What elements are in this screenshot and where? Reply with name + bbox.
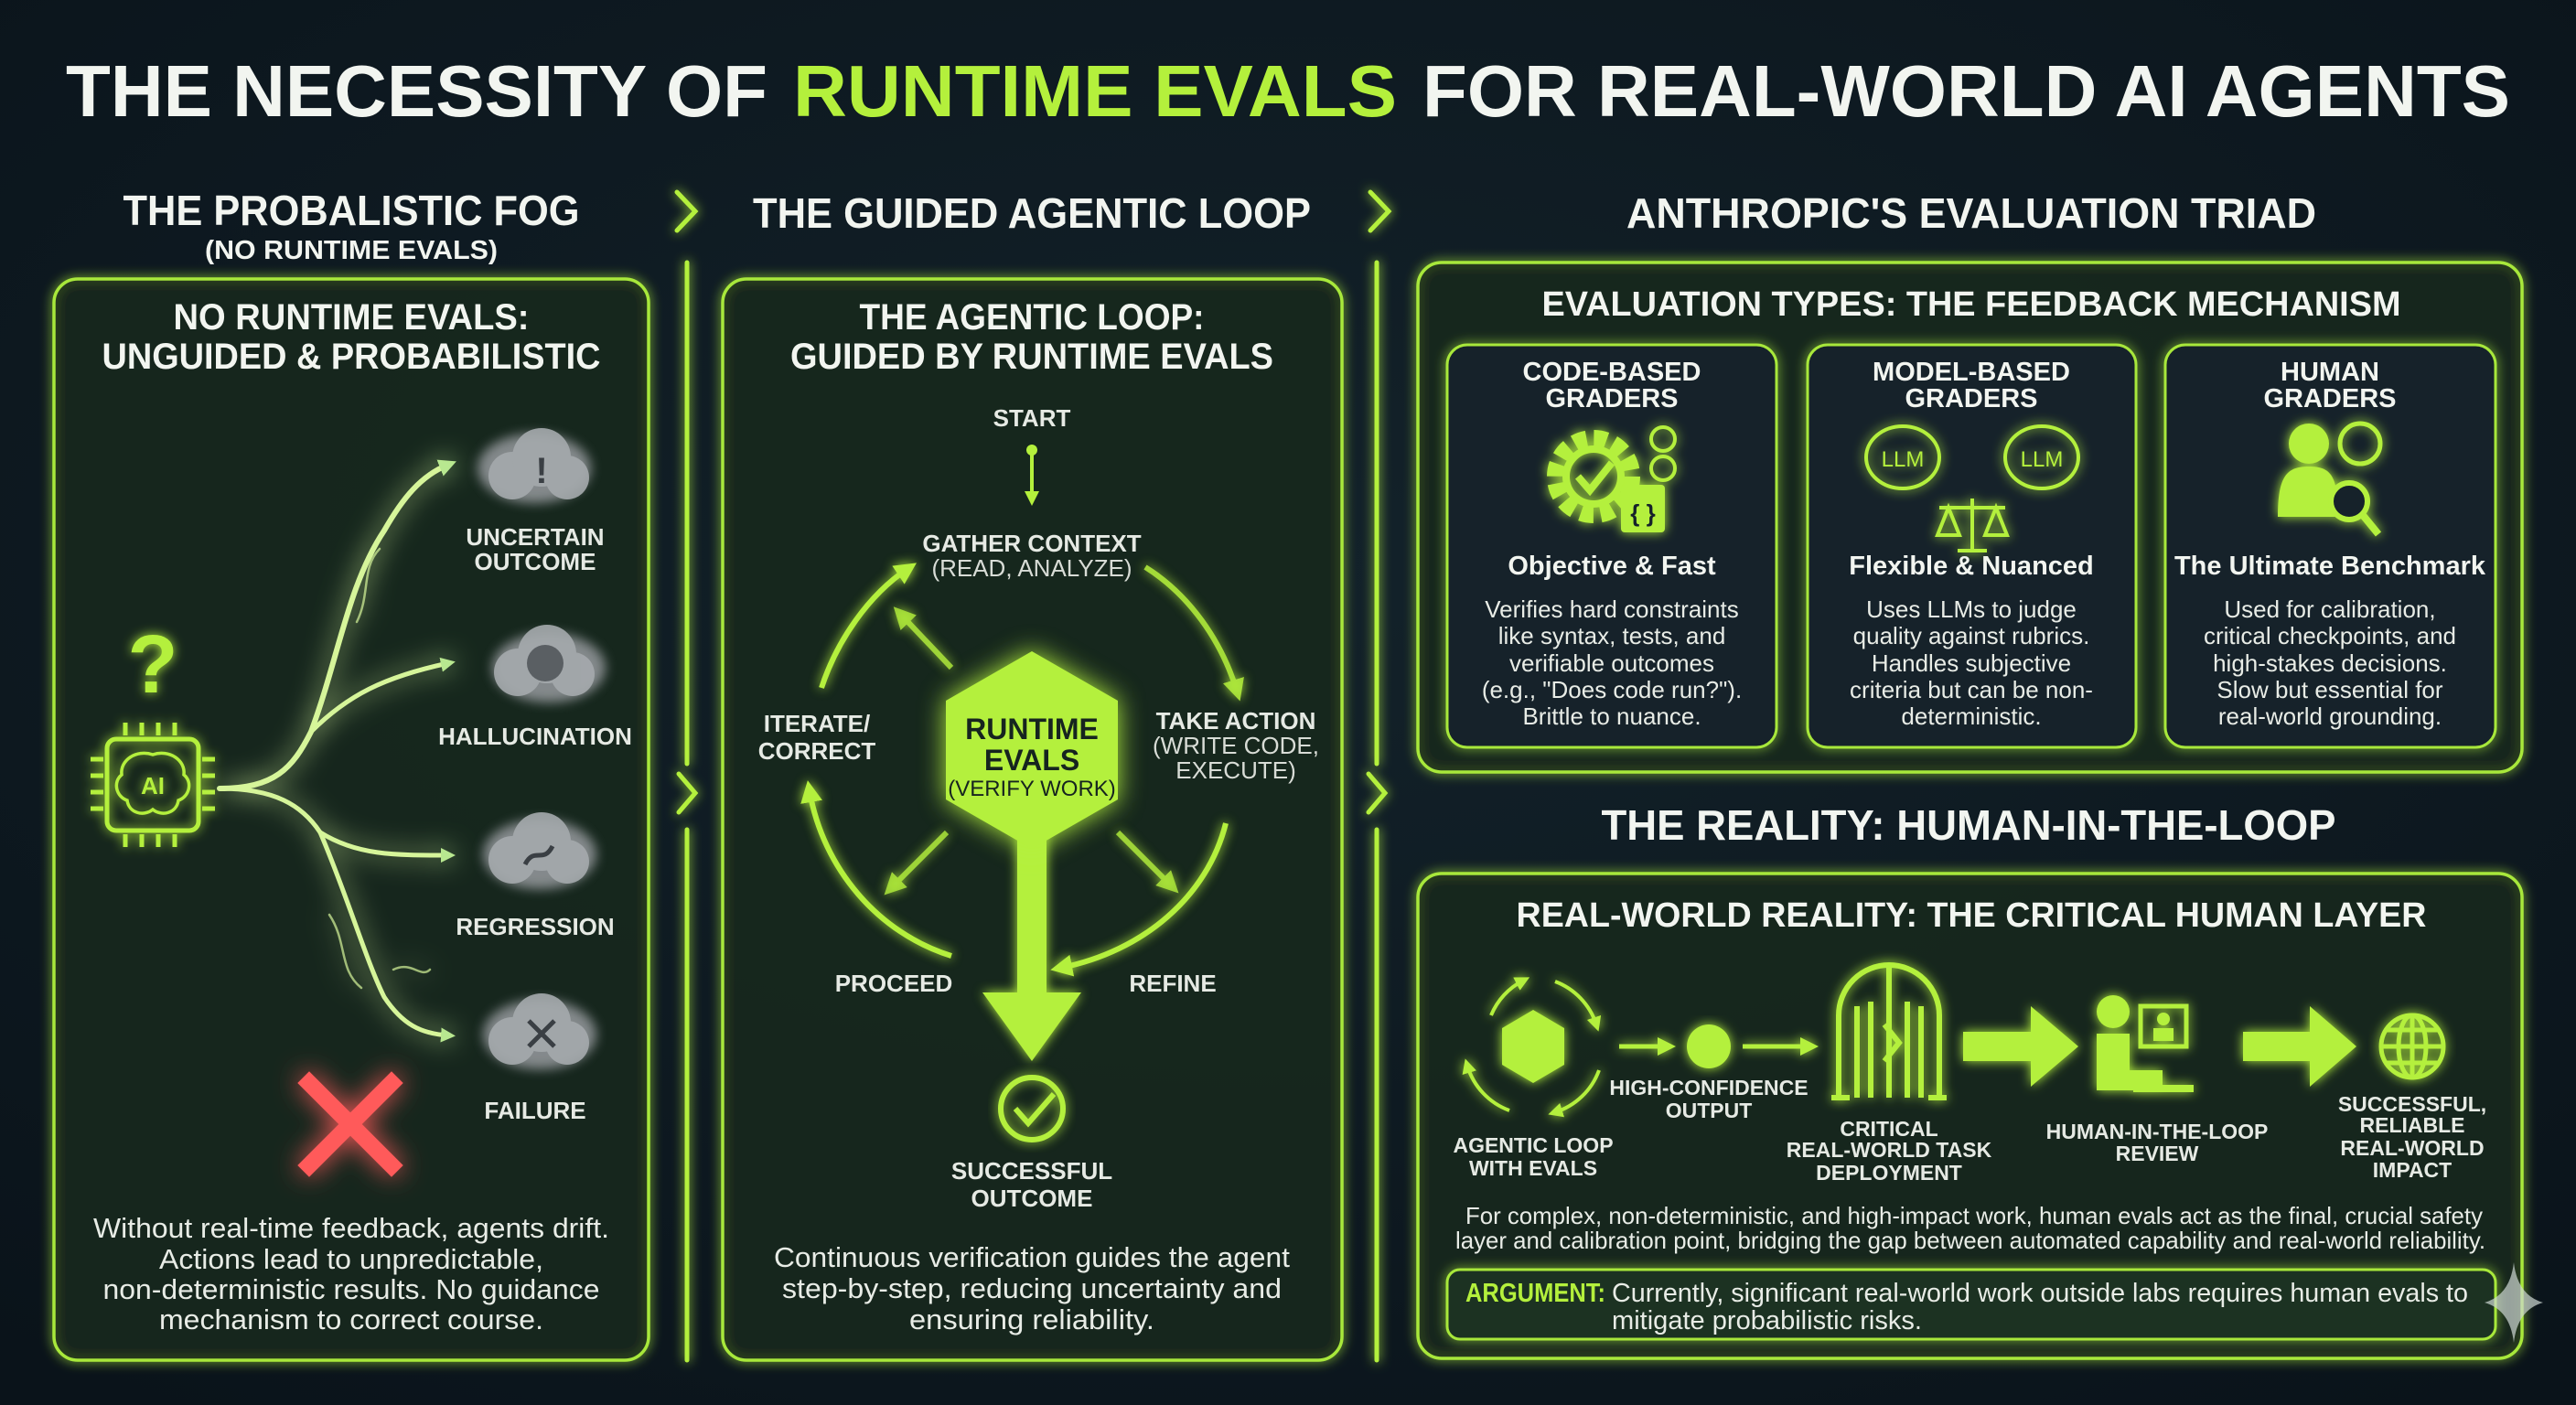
text block (774, 1241, 1290, 1335)
callout: argument (1447, 1270, 2496, 1339)
start label and arrow (993, 404, 1070, 499)
text block: Continuous verification guides the agent (774, 1241, 1290, 1273)
card: human graders: critical checkpoints, and (2204, 622, 2456, 649)
icon: success check (1001, 1078, 1063, 1140)
card: model-based graders: quality against rubrics. (1853, 622, 2089, 649)
flow labels: HUMAN-IN-THE-LOOP (2046, 1120, 2268, 1143)
card: model-based graders (1808, 345, 2136, 747)
icon: gear with code: { } (1630, 499, 1656, 527)
icon: AI chip: AI (141, 772, 165, 799)
icon: agentic loop (1467, 981, 1599, 1112)
outcome labels (438, 523, 632, 1124)
text block: Actions lead to unpredictable, (159, 1243, 543, 1275)
card: code-based graders: Objective & Fast (1508, 552, 1716, 581)
title: FOR REAL-WORLD AI AGENTS (1422, 50, 2510, 132)
branching lightning paths (220, 465, 448, 1035)
card: human graders: The Ultimate Benchmark (2174, 552, 2486, 581)
step labels (758, 530, 1319, 997)
flow labels: AGENTIC LOOP (1453, 1133, 1614, 1157)
dividers with chevrons (677, 192, 1389, 1360)
heading: probabilistic fog: (NO RUNTIME EVALS) (205, 236, 498, 265)
outcome label: SUCCESSFUL (951, 1157, 1112, 1185)
step labels: EXECUTE) (1175, 756, 1296, 784)
panel: probabilistic fog (54, 279, 649, 1360)
panel title: GUIDED BY RUNTIME EVALS (790, 337, 1273, 377)
card: human graders: real-world grounding. (2218, 702, 2442, 730)
panel title: UNGUIDED & PROBABILISTIC (102, 337, 600, 377)
flow labels: DEPLOYMENT (1816, 1161, 1962, 1185)
step labels: CORRECT (758, 737, 875, 765)
flow labels: RELIABLE (2360, 1113, 2464, 1137)
flow labels: CRITICAL (1840, 1117, 1938, 1141)
icon: LLM brains and scale: LLM (1882, 447, 1924, 472)
card: code-based graders: verifiable outcomes (1509, 649, 1714, 677)
panel title (102, 297, 600, 377)
card: code-based graders: CODE-BASED (1523, 358, 1701, 387)
icon: globe (2381, 1015, 2443, 1078)
panel: human layer (1418, 874, 2522, 1358)
icon: human reviewer at monitor (2097, 995, 2194, 1092)
text block (1455, 1202, 2485, 1254)
icon: AI chip (91, 723, 215, 847)
outcome labels: UNCERTAIN (466, 523, 605, 551)
loop arrows (810, 567, 1237, 968)
panel title (790, 297, 1273, 377)
text block: ensuring reliability. (909, 1303, 1154, 1335)
card: code-based graders: Brittle to nuance. (1522, 702, 1701, 730)
outcome labels: OUTCOME (475, 548, 596, 575)
card: human graders: GRADERS (2263, 384, 2397, 413)
flow labels: REVIEW (2116, 1142, 2199, 1165)
panel title: EVALUATION TYPES: THE FEEDBACK MECHANISM (1542, 285, 2400, 324)
card: model-based graders: deterministic. (1901, 702, 2042, 730)
text block: non-deterministic results. No guidance (102, 1273, 600, 1305)
start label and arrow: START (993, 404, 1070, 432)
text block: mechanism to correct course. (159, 1303, 543, 1335)
card: code-based graders: Verifies hard constraints (1485, 595, 1739, 623)
outcome labels: HALLUCINATION (438, 723, 632, 750)
card: model-based graders: MODEL-BASED (1873, 358, 2070, 387)
title: THE NECESSITY OF (66, 50, 767, 132)
panel: guided agentic loop (723, 279, 1342, 1360)
callout: argument: Currently, significant real-world work outside labs requires human evals to (1612, 1279, 2468, 1308)
flow labels: IMPACT (2373, 1158, 2452, 1182)
heading: probabilistic fog (123, 187, 580, 265)
title: RUNTIME EVALS (793, 50, 1397, 132)
step labels: GATHER CONTEXT (922, 530, 1142, 557)
text block: step-by-step, reducing uncertainty and (782, 1272, 1282, 1304)
flow labels: REAL-WORLD TASK (1787, 1138, 1992, 1162)
big arrow (2243, 1006, 2356, 1087)
heading: probabilistic fog: THE PROBALISTIC FOG (123, 187, 580, 234)
icon: LLM brains and scale (1866, 426, 2078, 551)
panel title: THE AGENTIC LOOP: (860, 297, 1204, 338)
step labels: ITERATE/ (764, 710, 870, 737)
outcome labels: FAILURE (484, 1097, 586, 1124)
panel: probabilistic fog: ! (535, 451, 548, 491)
flow labels: WITH EVALS (1469, 1156, 1597, 1180)
step labels: (WRITE CODE, (1153, 732, 1319, 759)
outcome labels: REGRESSION (456, 913, 615, 940)
icon: red X (309, 1083, 392, 1165)
callout: argument: mitigate probabilistic risks. (1612, 1306, 1922, 1335)
icon: LLM brains and scale: LLM (2021, 447, 2063, 472)
big arrow (1963, 1006, 2078, 1087)
text block: Without real-time feedback, agents drift. (93, 1212, 609, 1244)
card: human graders: high-stakes decisions. (2213, 649, 2447, 677)
card: code-based graders (1447, 345, 1776, 747)
card: model-based graders: GRADERS (1905, 384, 2038, 413)
arrows and output dot (1619, 1024, 1809, 1068)
step labels: TAKE ACTION (1156, 707, 1315, 735)
icon: gear with code (1555, 427, 1675, 532)
card: model-based graders: Handles subjective (1872, 649, 2071, 677)
callout: argument: ARGUMENT: (1465, 1279, 1605, 1308)
heading: guided agentic loop: THE GUIDED AGENTIC LOOP (753, 189, 1311, 237)
flow labels: OUTPUT (1666, 1099, 1752, 1122)
card: model-based graders: Flexible & Nuanced (1849, 552, 2094, 581)
card: code-based graders: (e.g., "Does code run?"). (1482, 676, 1742, 703)
title (66, 50, 2510, 132)
icon: deployment gate (1831, 965, 1947, 1098)
card: code-based graders: like syntax, tests, and (1498, 622, 1725, 649)
flow labels (1453, 1076, 2486, 1185)
card: human graders: Slow but essential for (2216, 676, 2443, 703)
panel title: REAL-WORLD REALITY: THE CRITICAL HUMAN LAYER (1517, 896, 2426, 935)
flow labels: SUCCESSFUL, (2338, 1092, 2486, 1116)
hexagon: runtime evals: EVALS (984, 744, 1079, 777)
card: model-based graders: criteria but can be non- (1850, 676, 2093, 703)
flow labels: REAL-WORLD (2340, 1136, 2485, 1160)
card: human graders (2165, 345, 2496, 747)
card: human graders: HUMAN (2281, 358, 2379, 387)
heading: evaluation triad: ANTHROPIC'S EVALUATION TRIAD (1626, 189, 2316, 237)
outcome label: OUTCOME (971, 1185, 1092, 1212)
icon: fog clouds (478, 434, 606, 1069)
down arrow to outcome (982, 823, 1081, 1061)
panel title: NO RUNTIME EVALS: (174, 297, 529, 338)
card: human graders: Used for calibration, (2224, 595, 2436, 623)
heading: human in the loop: THE REALITY: HUMAN-IN-THE-LOOP (1601, 801, 2336, 849)
panel: evaluation triad (1418, 263, 2522, 772)
icon: sparkle (2485, 1262, 2543, 1343)
outcome label (951, 1157, 1112, 1212)
step labels: (READ, ANALYZE) (931, 554, 1132, 582)
icon: human with magnifier and badge (2278, 424, 2380, 534)
text block: For complex, non-deterministic, and high-impact work, human evals act as the final, crucial safety (1465, 1202, 2483, 1229)
hexagon: runtime evals: RUNTIME (965, 713, 1099, 745)
step labels: PROCEED (835, 970, 952, 997)
hexagon: runtime evals (946, 651, 1118, 849)
hexagon: runtime evals: (VERIFY WORK) (948, 777, 1116, 801)
icon: question mark: ? (128, 619, 177, 711)
text block (93, 1212, 609, 1335)
text block: layer and calibration point, bridging the gap between automated capability and real-world reliability. (1455, 1227, 2485, 1254)
card: code-based graders: GRADERS (1545, 384, 1679, 413)
card: model-based graders: Uses LLMs to judge (1866, 595, 2077, 623)
step labels: REFINE (1129, 970, 1217, 997)
flow labels: HIGH-CONFIDENCE (1609, 1076, 1809, 1099)
